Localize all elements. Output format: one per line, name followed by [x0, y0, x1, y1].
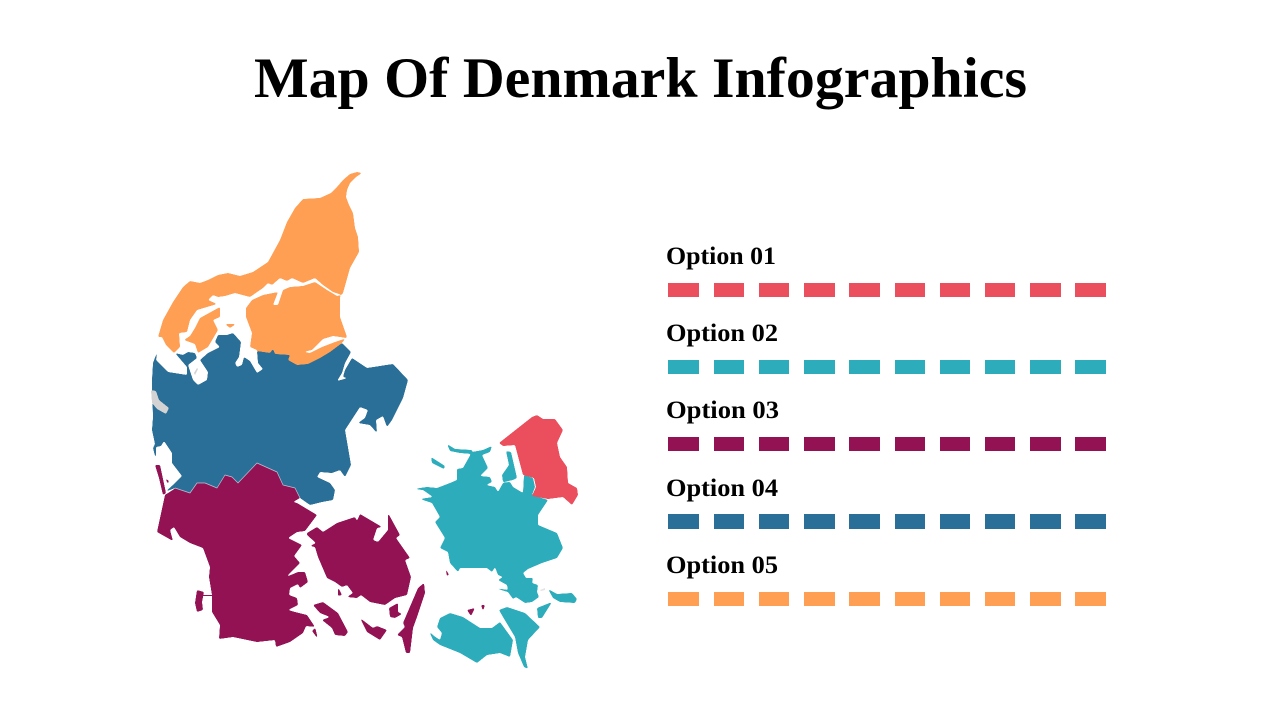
map of Denmark — [151, 172, 578, 669]
region: Copenhagen area (red) — [499, 415, 578, 505]
legend — [666, 243, 1106, 606]
option 03 — [666, 397, 1106, 451]
region: central Jutland (blue) — [152, 333, 408, 505]
region: south Jutland and Funen (purple) — [155, 440, 485, 653]
option 01: Option 01 — [666, 243, 776, 270]
link: islet connector — [203, 594, 212, 596]
region: Zealand and southern islands (teal) — [413, 444, 577, 669]
option 02 — [666, 320, 1106, 374]
region: north Jutland (orange) — [158, 172, 362, 368]
lagoon: Ringkobing fjord (grey) — [151, 390, 169, 414]
option 04: Option 04 — [666, 475, 779, 502]
lagoon: Nissum inlet (grey) — [194, 368, 198, 375]
title: Map Of Denmark Infographics — [254, 47, 1027, 110]
option 01 — [666, 243, 1106, 297]
border: blue and purple boundary — [175, 463, 300, 498]
detail: grey islet — [540, 588, 545, 591]
option 05 — [666, 552, 1106, 606]
option 04 — [666, 475, 1106, 529]
option 02: Option 02 — [666, 320, 778, 347]
option 03: Option 03 — [666, 397, 779, 424]
option 05: Option 05 — [666, 552, 778, 579]
